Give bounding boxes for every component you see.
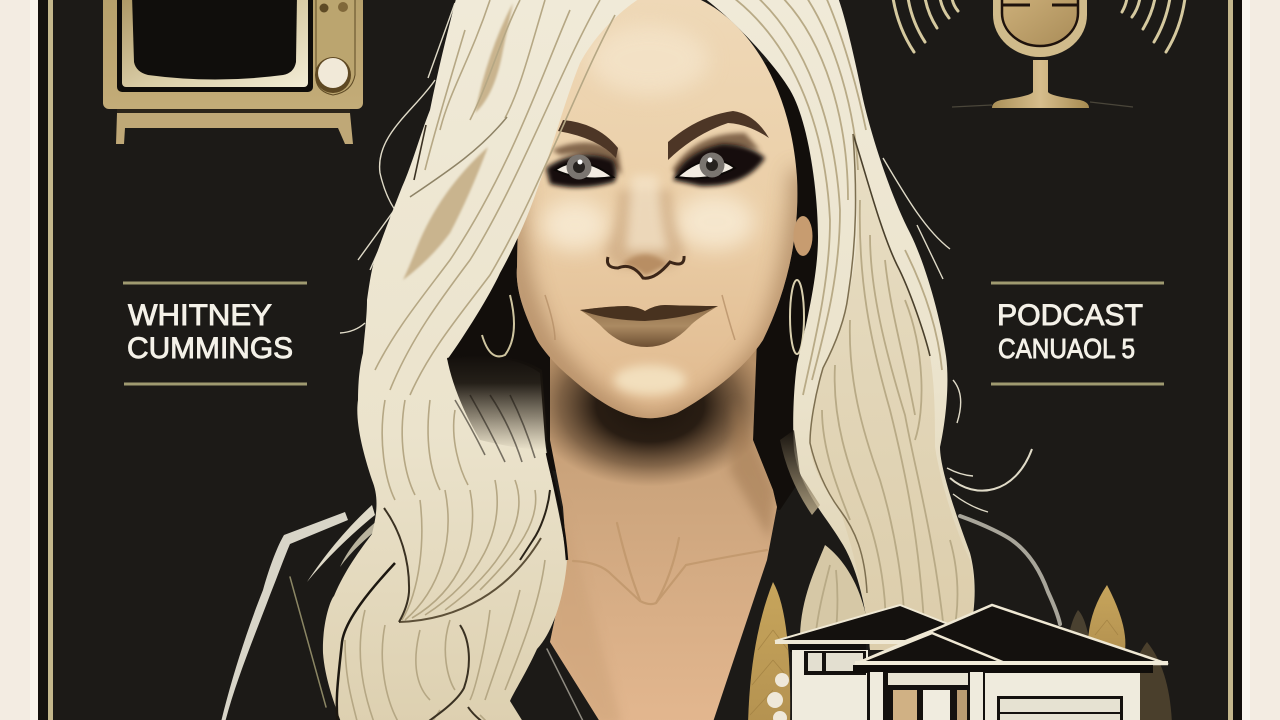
jacket outline (218, 512, 1060, 720)
hair: left side (323, 0, 645, 720)
ear and right earring (790, 216, 812, 354)
tan hair insets (403, 3, 513, 280)
dark hair shadow behind the face (447, 60, 820, 510)
right roof (853, 605, 1168, 673)
neck and chest (550, 348, 777, 720)
lips (580, 305, 718, 347)
left wing (775, 605, 948, 720)
text block: podcast: CANUAOL 5 (998, 333, 1135, 364)
dark root fade (447, 354, 548, 450)
text block: podcast: PODCAST (997, 299, 1143, 332)
right eye makeup and eye (672, 133, 765, 186)
lower right lock (800, 545, 870, 640)
eyebrows (558, 111, 769, 160)
faded strand beside neck (780, 430, 820, 515)
icon: house (775, 605, 1168, 720)
icon: retro television (103, 0, 363, 144)
nose (604, 175, 686, 278)
front lock outline (399, 538, 541, 622)
text block: Whitney Cummings: WHITNEY (128, 299, 272, 332)
text block: podcast (991, 282, 1164, 386)
text block: Whitney Cummings (123, 282, 307, 386)
garage (985, 673, 1140, 720)
left eye makeup and eye (546, 142, 622, 188)
loose hair wisps (307, 3, 1032, 582)
icon: microphone with sound waves (893, 0, 1185, 108)
trees behind the house (748, 582, 1172, 720)
hair: right side (700, 0, 975, 650)
porch and door (867, 672, 987, 720)
text block: Whitney Cummings: CUMMINGS (127, 332, 293, 365)
face (509, 0, 805, 430)
